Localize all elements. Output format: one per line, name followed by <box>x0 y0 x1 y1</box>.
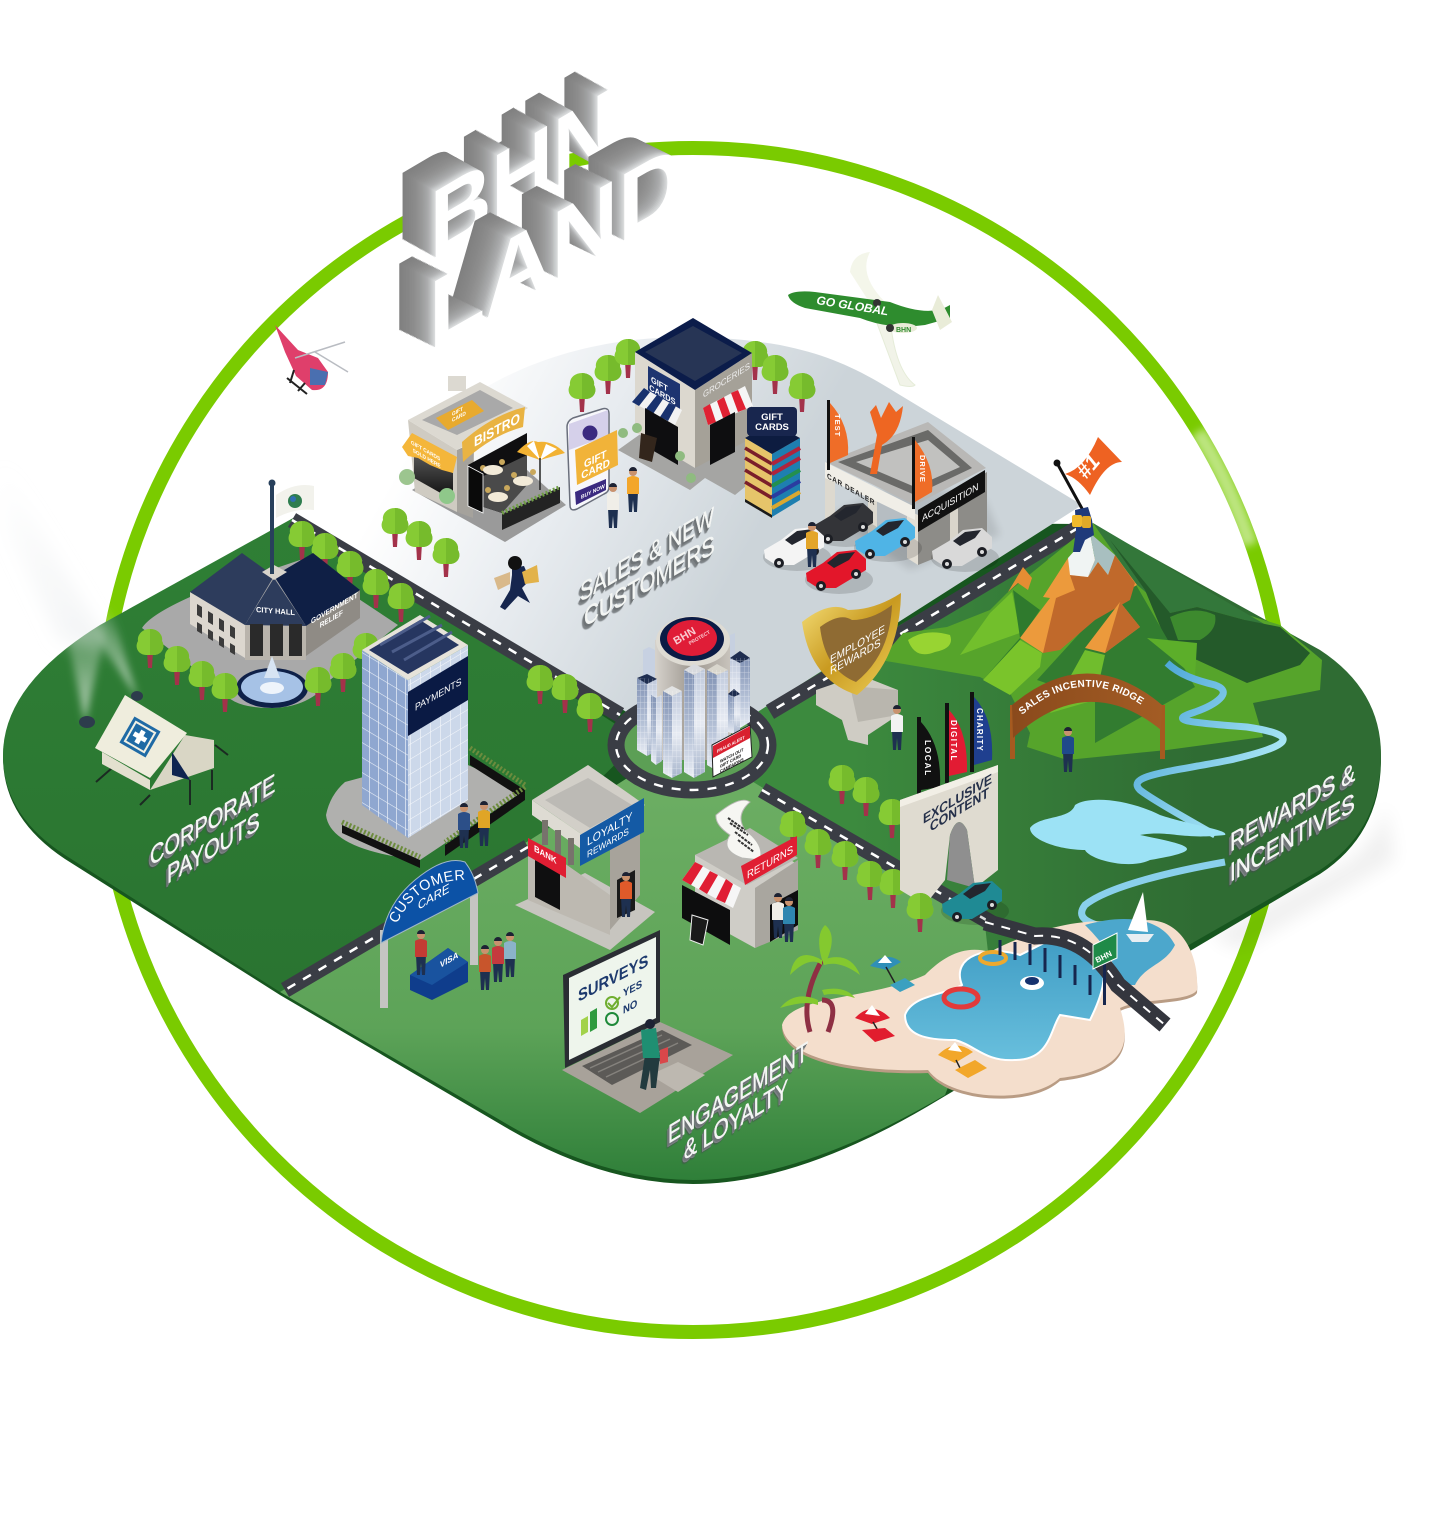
exclusive content text: EXCLUSIVE <box>923 770 992 827</box>
label: engagement: ENGAGEMENT <box>668 1035 808 1150</box>
bhn road sign <box>1093 933 1117 1005</box>
fountain <box>236 656 308 708</box>
drive flag: DRIVE <box>918 455 927 483</box>
person at laptop <box>640 1019 668 1090</box>
visa card stack: VISA <box>440 949 459 970</box>
no option: NO <box>623 997 637 1017</box>
quadrant: corporate payouts ground <box>3 517 640 992</box>
building: payments tower <box>326 615 525 868</box>
inflatable ring <box>980 952 1006 964</box>
sandwich board <box>639 433 657 462</box>
gift cards sold here awning: GIFT CARDS <box>411 440 440 463</box>
fraud alert sign <box>712 725 752 777</box>
fraud alert sign: GIFT CARD <box>720 753 742 769</box>
tent medical cross emblem <box>119 716 161 758</box>
red float <box>944 989 978 1007</box>
sales incentive ridge arch <box>1010 674 1165 772</box>
label: payouts: PAYOUTS <box>167 805 260 890</box>
gift card phone <box>567 409 639 528</box>
sand beach <box>780 892 1197 1099</box>
left light slope <box>960 592 1020 655</box>
flagpole with globe flag <box>268 480 314 574</box>
bistro sign <box>462 407 525 462</box>
no option <box>606 997 637 1025</box>
left dark slope <box>983 590 1040 680</box>
orange shadow side <box>1043 555 1135 653</box>
bistro sign: BISTRO <box>474 409 520 450</box>
customer care lettering: CUSTOMER <box>390 870 464 922</box>
green circle ring <box>101 148 1285 1332</box>
helicopter <box>275 325 348 394</box>
bhn road sign: BHN <box>1094 949 1114 965</box>
digital flag: DIGITAL <box>949 720 958 762</box>
right orange shadow <box>1105 602 1140 653</box>
pool <box>905 935 1104 1060</box>
snow shade <box>1088 533 1115 577</box>
light green foothills <box>880 523 1322 760</box>
swimmer float <box>1020 976 1044 990</box>
searchlight <box>79 716 95 728</box>
surveys laptop <box>562 930 733 1113</box>
shield: employee rewards <box>802 593 903 750</box>
bright triangle <box>1147 638 1197 677</box>
care lettering: CARE <box>418 880 450 913</box>
roads <box>285 520 1078 990</box>
trees: city hall front <box>137 629 379 712</box>
red striped awning <box>682 862 741 908</box>
patio tables <box>480 459 536 502</box>
arch lettering: SALES INCENTIVE RIDGE <box>1018 680 1144 714</box>
test flag: TEST <box>833 414 842 437</box>
building: car dealer <box>763 400 1000 594</box>
fraud alert sign: WATCH OUT <box>720 747 743 764</box>
label: and loyalty: & LOYALTY <box>684 1073 788 1166</box>
fraud alert sign: FRAUD ALERT <box>717 735 745 754</box>
payments sign <box>408 656 468 736</box>
government relief label: GOVERNMENT <box>311 590 358 626</box>
palm tree <box>780 925 860 1032</box>
sailboat <box>1126 892 1154 942</box>
employee rewards text: REWARDS <box>830 637 881 678</box>
receipt scroll <box>716 800 761 860</box>
lime bump <box>908 632 951 654</box>
right orange peak <box>1085 602 1140 653</box>
charity flag: CHARITY <box>975 708 984 752</box>
dark hills <box>1110 540 1310 683</box>
gift cards rack sign <box>747 407 797 436</box>
returns sign: RETURNS <box>747 843 793 882</box>
car dealer sign <box>825 462 915 520</box>
fraud alert sign: CAMPAIGNS <box>720 757 744 774</box>
bank door <box>535 860 560 910</box>
car dealer sign: CAR DEALER <box>827 471 875 508</box>
bay <box>1085 919 1175 985</box>
skyscrapers <box>637 651 750 778</box>
loyalty rewards sign: LOYALTY <box>587 809 632 849</box>
ground soft shadow <box>1210 800 1395 950</box>
quadrant: sales and new customers ground <box>298 337 1082 720</box>
pedestal <box>816 675 898 745</box>
yes option <box>606 978 642 1009</box>
building: returns store <box>682 800 798 948</box>
thief with gift card <box>494 556 539 610</box>
drive flag <box>912 437 932 509</box>
quadrant: engagement and loyalty ground <box>280 770 1010 1180</box>
trees <box>289 339 906 908</box>
a-frame sign <box>690 915 708 945</box>
teal truck <box>941 881 1009 925</box>
bhn protect badge text: PROTECT <box>688 630 712 647</box>
bistro roof gift card: CARD <box>452 411 466 424</box>
bhn mark: BHN <box>896 327 911 334</box>
number one flag and climber <box>1054 437 1122 552</box>
exclusive content gate <box>900 692 998 905</box>
planters <box>399 469 455 504</box>
gift cards sold here awning: SOLD HERE <box>413 448 441 470</box>
window grid <box>637 658 750 778</box>
patio hedge <box>502 487 560 530</box>
navy striped awning <box>632 388 682 425</box>
inflatable tube man <box>870 402 903 474</box>
customer care arch <box>380 860 516 1008</box>
left orange peak <box>1008 567 1032 592</box>
label: incentives: INCENTIVES <box>1230 786 1355 888</box>
logo: LAND: LAND <box>429 120 685 373</box>
searchlight 2 <box>131 691 143 701</box>
tent <box>79 691 228 805</box>
employee rewards text: EMPLOYEE <box>830 623 885 667</box>
label: sales and new customers: SALES & NEW <box>580 500 714 608</box>
building: bank with loyalty rewards <box>515 765 655 950</box>
label: corporate: CORPORATE <box>150 767 275 872</box>
center bhn protect towers <box>637 616 752 778</box>
building: bistro <box>399 376 566 542</box>
lower bright slope <box>983 640 1042 695</box>
payments sign: PAYMENTS <box>415 676 462 714</box>
acquisition sign: ACQUISITION <box>922 482 978 525</box>
gift cards sign on store: CARDS <box>649 382 676 407</box>
patio umbrella <box>517 441 565 490</box>
charity flag <box>970 692 992 772</box>
trees: gate <box>907 893 933 932</box>
surveys heading: SURVEYS <box>578 950 648 1006</box>
center bright slope <box>1050 650 1105 713</box>
local flag: LOCAL <box>923 740 933 777</box>
plane: go global <box>788 252 952 386</box>
mini bar chart <box>581 1008 597 1036</box>
ring highlight <box>1198 432 1250 545</box>
mid ridge <box>1037 555 1195 743</box>
gift cards rack sign: CARDS <box>755 422 789 433</box>
visa card stack <box>410 948 468 1000</box>
number one: #1 <box>1072 451 1105 483</box>
phone gift card banner: GIFT <box>584 448 607 471</box>
bistro roof gift card: GIFT <box>452 406 463 418</box>
digital flag <box>945 703 967 783</box>
groceries label: GROCERIES <box>703 360 750 400</box>
acquisition sign <box>918 470 985 532</box>
bank sign: BANK <box>534 843 557 866</box>
go global text: GO GLOBAL <box>816 293 889 318</box>
quadrant: rewards and incentives ground <box>750 520 1381 1060</box>
label: rewards and: REWARDS & <box>1230 756 1355 858</box>
gift cards sold here awning <box>402 433 457 473</box>
government relief label: RELIEF <box>320 607 343 630</box>
test flag <box>827 400 848 470</box>
cars <box>763 503 999 594</box>
big orange face <box>1020 555 1137 653</box>
yes option: YES <box>623 978 642 1000</box>
beach umbrellas <box>855 955 987 1078</box>
phone gift card banner <box>575 430 618 485</box>
building: grocery store <box>618 318 790 495</box>
loyalty rewards sign: REWARDS <box>587 826 629 861</box>
gift cards sign on store <box>648 366 680 414</box>
gift cards sign on store: GIFT <box>651 374 668 394</box>
inner hill <box>1170 610 1215 640</box>
building: city hall <box>142 480 398 708</box>
buy now tag: BUY NOW <box>581 483 606 501</box>
upper right ridge band <box>1093 523 1305 648</box>
searchlight beams <box>0 460 137 722</box>
bridge <box>985 922 1165 1025</box>
gift cards rack sign: GIFT <box>761 412 783 423</box>
planters <box>618 423 696 483</box>
bistro roof gift card <box>436 400 484 430</box>
red striped awning <box>703 386 753 425</box>
logo: BHN: BHN <box>430 66 614 283</box>
bhn protect badge text: BHN <box>672 625 698 648</box>
snow <box>1068 533 1095 577</box>
exclusive content text: CONTENT <box>930 784 989 835</box>
river and lake <box>1030 663 1283 935</box>
mountain <box>880 523 1322 760</box>
bank sign <box>528 838 566 878</box>
phone gift card banner: CARD <box>581 457 610 482</box>
returns sign <box>741 836 797 885</box>
local flag <box>917 717 940 797</box>
city hall label: CITY HALL <box>256 605 295 617</box>
loyalty rewards sign <box>580 798 644 866</box>
gift cards rack <box>745 407 800 518</box>
ground edge <box>3 520 1381 1184</box>
label: customers line: CUSTOMERS <box>584 528 715 633</box>
